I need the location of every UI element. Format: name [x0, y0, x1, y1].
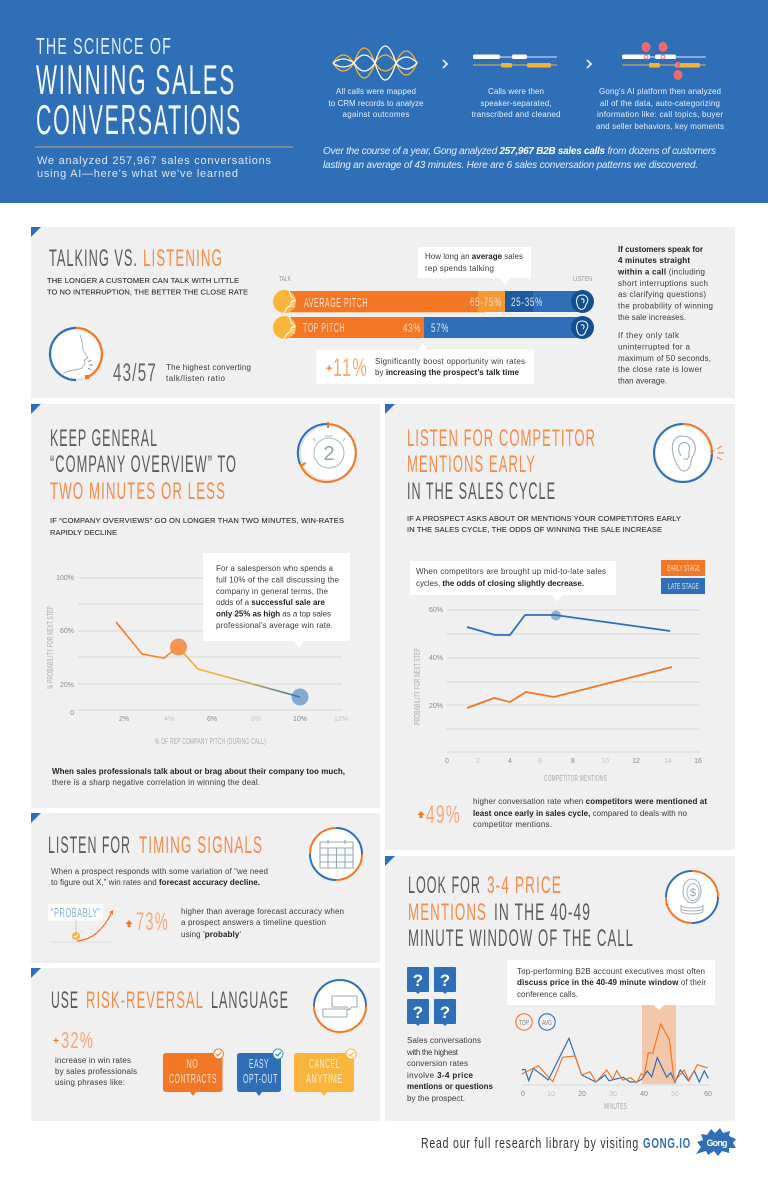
- line chart: win rate by company pitch: 8%: [251, 716, 261, 723]
- callout: ten percent: For a salesperson who spends a: [216, 564, 334, 573]
- text: conversion rates: involve 3-4 price: [407, 1071, 474, 1080]
- stat caption: [166, 363, 251, 383]
- heading: LISTENING: [143, 245, 223, 272]
- axis label listen: LISTEN: [573, 276, 592, 283]
- callout: mid to late: cycles, the odds of closing slightly decrease.: [416, 579, 584, 588]
- caption: step one: to CRM records to analyze: [328, 99, 424, 108]
- icon: question bubbles: ?: [440, 1003, 450, 1022]
- header subtitle: We analyzed 257,967 sales conversations: [37, 155, 272, 167]
- text: conversion rates: with the highest: [406, 1048, 459, 1057]
- text: negative correlation: [52, 767, 345, 787]
- heading: [408, 872, 634, 952]
- line chart: competitor mentions: 6: [538, 758, 542, 765]
- logo: Gong starburst: [696, 1128, 736, 1156]
- subheading: IF A PROSPECT ASKS ABOUT OR MENTIONS YOUR COMPETITORS EARLY: [407, 514, 681, 523]
- stat text: higher than average forecast accuracy when: [181, 907, 344, 916]
- callout: ten percent: odds of a successful sale are: [216, 598, 326, 607]
- panel: price mentions: [385, 856, 735, 1121]
- line chart: price mentions by minute: [516, 1000, 712, 1111]
- line chart: price mentions by minute: AVG: [542, 1020, 552, 1027]
- main title: CONVERSATIONS: [36, 96, 242, 143]
- text: figure out X: [51, 867, 268, 887]
- text: four minutes: [617, 245, 713, 322]
- heading: “COMPANY OVERVIEW” TO: [50, 451, 237, 478]
- stat: plus 32 percent: 32%: [61, 1027, 94, 1053]
- icon: stopwatch ring: [298, 422, 356, 482]
- line chart: price mentions by minute: 10: [547, 1091, 555, 1098]
- bar: top pitch: 43%: [403, 321, 421, 335]
- stat text: higher conversation rate when competitors were mentioned at: [473, 797, 707, 806]
- heading: LOOK FOR: [408, 872, 481, 899]
- heading: USE: [51, 987, 79, 1014]
- caption: step one: [328, 87, 424, 119]
- bar: average pitch: AVERAGE PITCH: [304, 295, 368, 310]
- subheading: [50, 516, 344, 537]
- header intro text: [323, 146, 716, 171]
- callout: ten percent: professional's average win rate.: [216, 621, 333, 630]
- stat text: using 'probably': [181, 930, 241, 939]
- text: conversion rates: [406, 1036, 494, 1103]
- stat: plus 73 percent: 73%: [136, 908, 169, 936]
- legend: EARLY STAGE: [667, 564, 700, 573]
- line chart: win rate by company pitch: 2%: [119, 716, 129, 723]
- line chart: competitor mentions: 8: [571, 758, 575, 765]
- bar: top pitch: [273, 316, 594, 339]
- subheading: IF “COMPANY OVERVIEWS” GO ON LONGER THAN TWO MINUTES, WIN-RATES: [50, 516, 344, 525]
- line chart: competitor mentions: 10: [601, 758, 609, 765]
- text: fifty seconds: maximum of 50 seconds,: [618, 354, 711, 363]
- stat text: [181, 907, 344, 939]
- callout: average rep talking: How long an average sales: [425, 252, 523, 261]
- icon: AI categorized tracks: [622, 42, 706, 80]
- logo: Gong starburst: Gong: [706, 1138, 728, 1148]
- stat: plus 49 percent: [418, 801, 461, 829]
- line chart: price mentions by minute: 60: [704, 1091, 712, 1098]
- callout: average rep talking: rep spends talking: [425, 264, 494, 273]
- stat text: by sales professionals: [55, 1067, 137, 1076]
- line chart: competitor mentions: 4: [508, 758, 512, 765]
- heading: MENTIONS EARLY: [407, 451, 536, 478]
- line chart: win rate by company pitch: 0: [70, 710, 74, 717]
- text: fifty seconds: If they only talk: [618, 331, 680, 340]
- line chart: win rate by company pitch: 10%: [293, 716, 307, 723]
- line chart: competitor mentions: 2: [476, 758, 480, 765]
- heading: 3-4 PRICE: [487, 872, 562, 899]
- stat text: using phrases like:: [55, 1078, 125, 1087]
- icon: ear ring: [654, 424, 724, 482]
- heading: TIMING SIGNALS: [139, 832, 263, 859]
- badge: cancel anytime: CANCEL: [309, 1056, 340, 1071]
- line chart: price mentions by minute: MINUTES: [604, 1102, 627, 1111]
- subheading: [47, 276, 248, 296]
- callout: forty to forty-nine minute window: conference calls.: [517, 990, 578, 999]
- line chart: win rate by company pitch: 100%: [56, 575, 74, 582]
- heading: [407, 425, 596, 505]
- line chart: competitor mentions: 60%: [429, 607, 443, 614]
- line chart: win rate by company pitch: 12%: [334, 716, 348, 723]
- icon: probably bubble and curve: [48, 904, 113, 942]
- line chart: win rate by company pitch: 60%: [60, 628, 74, 635]
- icon: question bubbles: [407, 967, 456, 1026]
- line chart: price mentions by minute: 0: [521, 1091, 525, 1098]
- line chart: competitor mentions: 16: [694, 758, 702, 765]
- icon: question bubbles: ?: [413, 1003, 423, 1022]
- line chart: win rate by company pitch: % PROBABILITY FOR NEXT STEP: [46, 606, 55, 689]
- header subtitle: [37, 155, 272, 180]
- footer call to action: GONG.IO: [643, 1135, 691, 1152]
- arrow: [443, 60, 447, 68]
- text: four minutes: as clarifying questions): [618, 290, 706, 299]
- badge: no contracts: [163, 1049, 224, 1096]
- heading: KEEP GENERAL: [50, 425, 158, 452]
- callout: average rep talking: [418, 247, 531, 285]
- line chart: competitor mentions: 20%: [429, 703, 443, 710]
- subheading: TO NO INTERRUPTION, THE BETTER THE CLOSE RATE: [47, 288, 248, 296]
- badge: no contracts: CONTRACTS: [169, 1071, 217, 1086]
- text: fifty seconds: the close rate is lower: [618, 365, 702, 374]
- main title: [36, 33, 242, 143]
- line chart: price mentions by minute: 20: [578, 1091, 586, 1098]
- icon: coins ring: [666, 871, 718, 923]
- main title: THE SCIENCE OF: [36, 33, 172, 59]
- text: figure out X: to figure out X,” win rates and forecast accuracy decline.: [51, 878, 260, 887]
- stat caption: The highest converting: [166, 363, 251, 372]
- text: conversion rates: conversion rates: [407, 1059, 468, 1068]
- line chart: competitor mentions: [413, 607, 702, 783]
- badge: cancel anytime: ANYTIME: [306, 1071, 343, 1086]
- bar: average pitch: [273, 290, 594, 313]
- panel: competitor mentions: [385, 404, 735, 850]
- subheading: THE LONGER A CUSTOMER CAN TALK WITH LITTLE: [47, 276, 239, 285]
- header subtitle: using AI—here's what we've learned: [37, 168, 238, 180]
- caption: step two: [472, 87, 560, 119]
- legend: LATE STAGE: [668, 582, 699, 591]
- text: fifty seconds: than average.: [618, 376, 667, 386]
- badge: cancel anytime: [294, 1049, 356, 1096]
- caption: step three: [596, 87, 724, 131]
- text: four minutes: short interruptions such: [618, 279, 708, 288]
- text: fifty seconds: uninterrupted for a: [618, 342, 691, 352]
- line chart: win rate by company pitch: [46, 575, 348, 746]
- badge: easy opt-out: EASY: [249, 1056, 269, 1071]
- callout: plus 11 percent: by increasing the prospect's talk time: [375, 368, 520, 377]
- callout: plus 11 percent: 11%: [333, 354, 368, 382]
- callout: mid to late: When competitors are brought up mid-to-late sales: [416, 567, 606, 576]
- stat: plus 73 percent: [126, 908, 169, 936]
- text: negative correlation: When sales professionals talk about or brag about their company too much,: [52, 767, 345, 776]
- caption: step two: speaker-separated,: [480, 99, 552, 108]
- text: four minutes: the probability of winning: [618, 302, 713, 310]
- icon: speech bubbles ring: [314, 980, 366, 1032]
- heading: MENTIONS: [408, 899, 487, 926]
- line chart: price mentions by minute: 30: [609, 1091, 617, 1098]
- text: four minutes: within a call (including: [617, 268, 705, 276]
- caption: step one: against outcomes: [342, 110, 410, 119]
- caption: step three: and seller behaviors, key moments: [596, 122, 724, 131]
- badge: easy opt-out: OPT-OUT: [243, 1071, 278, 1086]
- stat text: [473, 797, 707, 829]
- line chart: competitor mentions: COMPETITOR MENTIONS: [544, 774, 607, 783]
- line chart: win rate by company pitch: 20%: [60, 682, 74, 689]
- callout: plus 11 percent: Significantly boost opportunity win rates: [375, 357, 525, 366]
- heading: LISTEN FOR: [48, 832, 131, 859]
- panel: talking vs listening: [31, 227, 735, 398]
- line chart: win rate by company pitch: 4%: [164, 716, 174, 723]
- caption: step two: Calls were then: [488, 87, 544, 96]
- bar: top pitch: 57%: [431, 321, 449, 335]
- badge: no contracts: NO: [186, 1056, 198, 1071]
- caption: step three: all of the data, auto-categorizing: [600, 99, 720, 108]
- caption: step three: Gong's AI platform then analyzed: [599, 87, 721, 96]
- icon: question bubbles: ?: [440, 971, 450, 990]
- line chart: price mentions by minute: TOP: [519, 1020, 529, 1027]
- bar: average pitch: 25-35%: [511, 295, 543, 309]
- header intro text: Over the course of a year, Gong analyzed 257,967 B2B sales calls from dozens of customers: [323, 146, 716, 157]
- arrow: [587, 60, 591, 68]
- footer call to action: Read our full research library by visiting: [421, 1135, 639, 1152]
- main title: WINNING SALES: [36, 56, 236, 103]
- heading: IN THE SALES CYCLE: [407, 478, 556, 505]
- panel: company overview: [31, 404, 380, 808]
- bar: top pitch: TOP PITCH: [303, 320, 345, 335]
- callout: forty to forty-nine minute window: discuss price in the 40-49 minute window of their: [517, 978, 706, 987]
- line chart: win rate by company pitch: % OF REP COMPANY PITCH (DURING CALL): [155, 737, 266, 746]
- icon: speaker separated tracks: [473, 54, 557, 68]
- header intro text: lasting an average of 43 minutes. Here are 6 sales conversation patterns we discovered.: [323, 160, 698, 171]
- line chart: competitor mentions: PROBABILITY FOR NEXT STEP: [413, 648, 422, 725]
- stat text: [55, 1056, 137, 1087]
- text: negative correlation: there is a sharp negative correlation in winning the deal.: [52, 778, 260, 787]
- callout: forty to forty-nine minute window: [507, 960, 715, 1010]
- callout: forty to forty-nine minute window: Top-performing B2B account executives most often: [517, 967, 705, 976]
- footer call to action: [421, 1128, 736, 1156]
- text: figure out X: When a prospect responds with some variation of “we need: [51, 867, 268, 876]
- caption: step one: All calls were mapped: [336, 87, 416, 96]
- line chart: win rate by company pitch: 6%: [207, 716, 217, 723]
- stat: plus 49 percent: 49%: [426, 801, 461, 829]
- callout: mid to late: [410, 561, 616, 602]
- text: four minutes: If customers speak for: [618, 245, 703, 254]
- heading: LISTEN FOR COMPETITOR: [407, 425, 596, 452]
- text: conversion rates: mentions or questions: [407, 1082, 494, 1091]
- panel: risk reversal: [31, 968, 380, 1121]
- text: four minutes: 4 minutes straight: [618, 256, 690, 265]
- subheading: IN THE SALES CYCLE, THE ODDS OF WINNING THE SALE INCREASE: [407, 525, 662, 534]
- heading: RISK-REVERSAL: [86, 987, 204, 1014]
- stat: 43/57: 43/57: [113, 359, 157, 387]
- stat text: increase in win rates: [55, 1056, 131, 1065]
- line chart: competitor mentions: 14: [664, 758, 672, 765]
- callout: ten percent: company in general terms, the: [216, 587, 329, 596]
- line chart: competitor mentions: 12: [632, 758, 640, 765]
- line chart: competitor mentions: 0: [445, 758, 449, 765]
- heading: LANGUAGE: [211, 987, 289, 1014]
- icon: question bubbles: ?: [413, 971, 423, 990]
- stat text: competitor mentions.: [473, 820, 552, 829]
- callout: ten percent: [203, 553, 350, 648]
- callout: ten percent: full 10% of the call discussing the: [216, 576, 340, 584]
- bar: average pitch: 65-75%: [470, 295, 502, 309]
- heading: IN THE 40-49: [494, 899, 591, 926]
- icon: talking face ring: [50, 328, 102, 380]
- stat: plus 32 percent: +: [53, 1036, 59, 1047]
- callout: plus 11 percent: +: [326, 363, 332, 375]
- text: conversion rates: Sales conversations: [407, 1036, 481, 1045]
- icon: coins ring: $: [690, 887, 696, 899]
- subheading: RAPIDLY DECLINE: [50, 528, 117, 537]
- badge: easy opt-out: [237, 1049, 283, 1096]
- caption: step three: information like: call topics, buyer: [597, 110, 723, 119]
- caption: step two: transcribed and cleaned: [472, 110, 560, 119]
- stat text: a prospect answers a timeline question: [181, 918, 326, 927]
- heading: [50, 425, 237, 505]
- line chart: price mentions by minute: 50: [671, 1091, 679, 1098]
- stat text: least once early in sales cycle, compared to deals with no: [473, 809, 688, 818]
- header banner: [0, 0, 768, 203]
- icon: sound waves: [333, 46, 417, 80]
- icon: stopwatch ring: 2: [323, 443, 335, 465]
- panel: timing signals: [31, 813, 380, 963]
- heading: TWO MINUTES OR LESS: [50, 478, 226, 505]
- text: four minutes: the sale increases.: [618, 313, 686, 322]
- subheading: [407, 514, 681, 534]
- axis label talk: TALK: [279, 276, 291, 283]
- callout: plus 11 percent: [316, 343, 534, 384]
- legend: [661, 560, 705, 594]
- stat caption: talk/listen ratio: [166, 374, 226, 383]
- text: conversion rates: by the prospect.: [407, 1094, 465, 1103]
- icon: calendar ring: [310, 828, 362, 880]
- heading: TALKING VS.: [49, 245, 138, 272]
- stat: plus 32 percent: [53, 1027, 94, 1053]
- callout: ten percent: only 25% as high as a top sales: [216, 610, 331, 618]
- line chart: price mentions by minute: 40: [640, 1091, 648, 1098]
- text: fifty seconds: [618, 331, 711, 386]
- icon: probably bubble and curve: “PROBABLY”: [51, 905, 101, 920]
- line chart: competitor mentions: 40%: [429, 655, 443, 662]
